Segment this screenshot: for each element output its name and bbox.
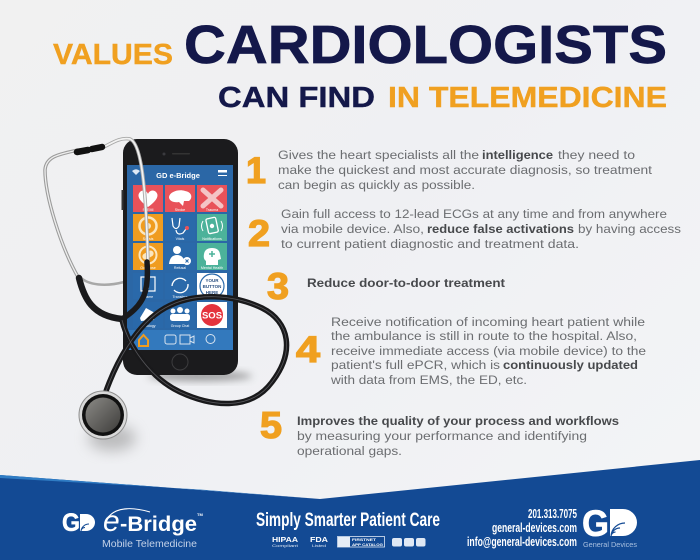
title word: cardiologists: CARDIOLOGISTS: [184, 15, 667, 75]
icon: history: [206, 334, 215, 344]
item 2 text: by having access: [578, 222, 681, 236]
item 5 text: by measuring your performance and identifying: [297, 429, 587, 443]
number 2: 2: [248, 213, 270, 254]
tile: Trauma: [197, 185, 227, 212]
title line: can find: CAN FIND: [218, 82, 375, 114]
contact details: general-devices.com: [492, 520, 577, 535]
chestpiece shadow: [88, 425, 136, 451]
item 4 text: [330, 315, 646, 387]
screen bottom bar: [127, 330, 233, 350]
title: [53, 15, 667, 114]
chestpiece: [79, 391, 127, 439]
tile: Transfers: Transfers: [172, 295, 188, 299]
badge: HIPAA: Compliant: [272, 543, 299, 548]
number 4: 4: [296, 329, 320, 370]
logo: e-Bridge: [103, 505, 203, 538]
icon: video: [180, 335, 194, 344]
item 3 text: Reduce door-to-door treatment: [307, 276, 505, 290]
logo: General Devices: G: [582, 503, 609, 544]
item 5 text: [297, 414, 619, 458]
left ear tube: [45, 150, 78, 277]
main tube: [105, 297, 287, 404]
tile: Notifications: Notifications: [202, 237, 222, 241]
logo: GD small: G: [62, 509, 80, 537]
number 1: 1: [246, 150, 266, 191]
screen header: [132, 169, 227, 180]
tile: Trauma: Trauma: [206, 208, 218, 212]
tile: Frame: [133, 273, 163, 299]
illustration: phone and stethoscope: [45, 139, 287, 451]
title line: in telemedicine: IN TELEMEDICINE: [388, 82, 667, 114]
tile: Refusal: Refusal: [174, 266, 186, 270]
tile: Stroke: [165, 185, 195, 212]
title word: values: VALUES: [53, 39, 173, 71]
badge: FirstNet app catalog: [338, 536, 384, 547]
tile: Stroke: Stroke: [175, 208, 185, 212]
badge: FDA: FDA: [310, 535, 329, 544]
logo: e-Bridge: -Bridge: [120, 513, 197, 536]
item 4 text: patient's full ePCR, which is: [331, 358, 500, 372]
badge: platform icons: [392, 538, 426, 546]
item 4 text: receive immediate access (via mobile device) to the: [331, 344, 646, 358]
badge: FDA: [310, 535, 329, 548]
tile: your button here: HERE: [206, 290, 218, 295]
contact details: [467, 506, 577, 549]
tile: Transfers: [165, 273, 195, 299]
tile: SOS: SOS: [202, 310, 222, 322]
tile: Mental Health: [197, 243, 227, 270]
tile: Sepsis: [133, 214, 163, 241]
badge: FDA: Listed: [312, 543, 326, 548]
right binaural: [122, 262, 147, 319]
item 1 text: Gives the heart specialists all the: [278, 148, 479, 162]
tile: STEMI: STEMI: [143, 208, 153, 212]
tile: Mental Health: Mental Health: [201, 266, 223, 270]
contact details: 201.313.7075: [528, 506, 577, 521]
item 1 text: make the quickest and most accurate diagnosis, so treatment: [278, 163, 653, 177]
number 5: 5: [260, 405, 282, 446]
logo tagline: Mobile Telemedicine: [102, 539, 197, 550]
item 4 text: continuously updated: [503, 358, 638, 372]
item 1 text: intelligence: [482, 148, 553, 162]
tile: STEMI: [133, 185, 163, 212]
badge: HIPAA: [272, 535, 299, 548]
tile: Sepsis: Sepsis: [143, 237, 154, 241]
logo: GD small: [62, 509, 95, 537]
tile: SOS: [197, 302, 227, 328]
badge: HIPAA: HIPAA: [272, 535, 299, 544]
item 2 text: reduce false activations: [427, 222, 574, 236]
logo: General Devices: General Devices: [583, 540, 637, 549]
tile: Group Chat: Group Chat: [171, 324, 189, 328]
tile: Vitals: Vitals: [176, 237, 185, 241]
logo: General Devices: [582, 503, 637, 549]
tile: your button here: [197, 273, 227, 299]
phone screen: [127, 165, 233, 350]
icon: home: [139, 335, 148, 346]
right ear tube: [102, 139, 148, 262]
item 1: [246, 148, 653, 192]
stethoscope thin strand behind phone: [80, 277, 124, 285]
item 5: [260, 405, 619, 458]
screen header: GD e-Bridge: [156, 171, 200, 180]
phone: [122, 139, 238, 375]
slogan: Simply Smarter Patient Care: [256, 510, 440, 531]
tile: Frame: Frame: [143, 295, 153, 299]
item 2: [248, 207, 681, 254]
tile: Overdose: Overdose: [140, 266, 156, 270]
item 5 text: operational gaps.: [297, 444, 402, 458]
item 2 text: [281, 207, 681, 251]
logo: e-Bridge: e: [103, 505, 120, 538]
tile: Notifications: [197, 214, 227, 241]
phone shadow: [148, 371, 252, 381]
item 2 text: Gain full access to 12-lead ECGs at any time and from anywhere: [281, 207, 667, 221]
left binaural: [79, 278, 122, 319]
footer band: [0, 460, 700, 560]
tile: Group Chat: [165, 302, 195, 328]
tile: your button here: YOUR: [205, 278, 219, 283]
item 2 text: to current patient diagnostic and treatment data.: [281, 237, 579, 251]
badge: FirstNet app catalog: APP CATALOG: [352, 543, 383, 547]
stethoscope: [45, 139, 287, 451]
item 4: [296, 315, 646, 387]
item 4 text: the ambulance is still in route to the hospital. Also,: [331, 329, 637, 343]
item 4 text: Receive notification of incoming heart patient while: [331, 315, 645, 329]
item 1 text: [278, 148, 653, 192]
icon: camera: [165, 335, 176, 344]
contact details: info@general-devices.com: [467, 534, 577, 549]
item 2 text: via mobile device. Also,: [281, 222, 424, 236]
tile: Oncology: Oncology: [140, 324, 156, 328]
item 1 text: can begin as quickly as possible.: [278, 178, 475, 192]
tile: Vitals: [165, 214, 195, 241]
item 1 text: they need to: [558, 148, 635, 162]
tile: Overdose: [133, 243, 163, 270]
item 5 text: Improves the quality of your process and workflows: [297, 414, 619, 428]
tile: your button here: BUTTON: [203, 284, 221, 289]
item 4 text: with data from EMS, the ED, etc.: [330, 373, 527, 387]
badge: FirstNet app catalog: FIRSTNET: [352, 538, 377, 542]
item 3: [267, 266, 505, 307]
tile: Oncology: [133, 302, 163, 328]
number 3: 3: [267, 266, 289, 307]
ear tips: [77, 147, 102, 152]
tile: Refusal: [165, 243, 195, 270]
logo: e-Bridge: TM: [197, 512, 203, 517]
